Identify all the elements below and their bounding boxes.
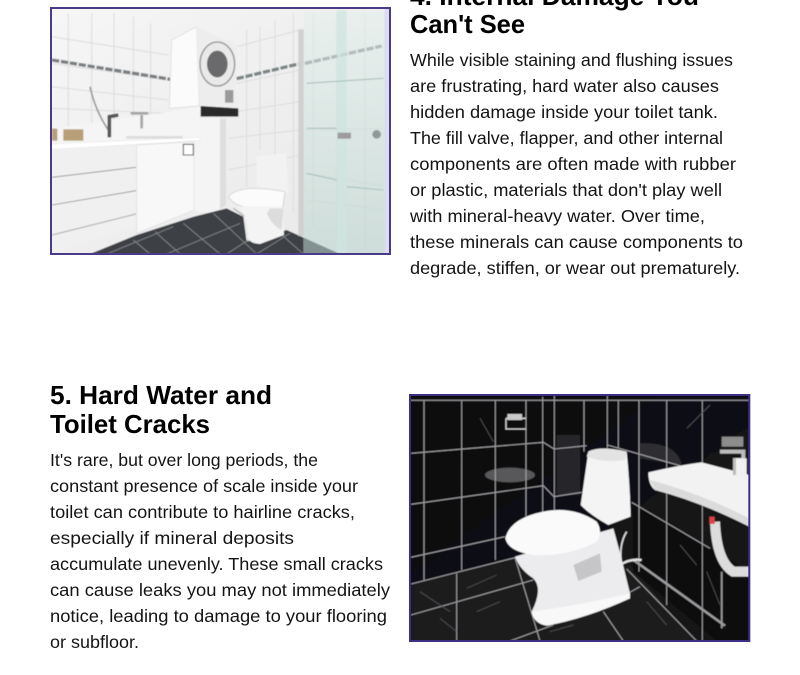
text block: section 5 body: toilet can contribute to hairline cracks, — [50, 502, 355, 522]
text block: section 4 body: degrade, stiffen, or wear out prematurely. — [410, 258, 740, 278]
heading: 5. Hard Water and Toilet Cracks — [50, 380, 272, 439]
text block: section 5 body: can cause leaks you may not immediately — [50, 580, 390, 600]
text block: section 5 body: constant presence of scale inside your — [50, 476, 358, 496]
text block: section 5 body: especially if mineral deposits — [50, 528, 294, 548]
text block: section 4 body: are frustrating, hard water also causes — [410, 76, 719, 96]
text block: section 5 body: or subfloor. — [50, 632, 139, 652]
text block: section 4 body: While visible staining and flushing issues — [410, 50, 733, 70]
photo: white bathroom with stacked dryer and toilet — [51, 8, 390, 254]
heading: 5. Hard Water and Toilet Cracks: Toilet Cracks — [50, 409, 210, 439]
text block: section 4 body: The fill valve, flapper, and other internal — [410, 128, 723, 148]
text block: section 5 body: notice, leading to damage to your flooring — [50, 606, 387, 626]
heading: 5. Hard Water and Toilet Cracks: 5. Hard Water and — [50, 380, 272, 410]
photo: black marble bathroom with white toilet and sink — [410, 395, 749, 641]
text block: section 4 body: with mineral-heavy water. Over time, — [409, 206, 705, 226]
heading: 4. Internal Damage You Can't See — [410, 0, 699, 39]
text block: section 4 body — [409, 50, 743, 278]
heading: 4. Internal Damage You Can't See: Can't See — [410, 9, 525, 39]
text block: section 4 body: or plastic, materials that don't play well — [410, 180, 722, 200]
text block: section 4 body: hidden damage inside your toilet tank. — [410, 102, 718, 122]
text block: section 4 body: these minerals can cause components to — [410, 232, 743, 252]
text block: section 5 body: It's rare, but over long periods, the — [50, 450, 318, 470]
text block: section 5 body — [50, 450, 390, 652]
text block: section 5 body: accumulate unevenly. These small cracks — [50, 554, 383, 574]
text block: section 4 body: components are often made with rubber — [410, 154, 736, 174]
